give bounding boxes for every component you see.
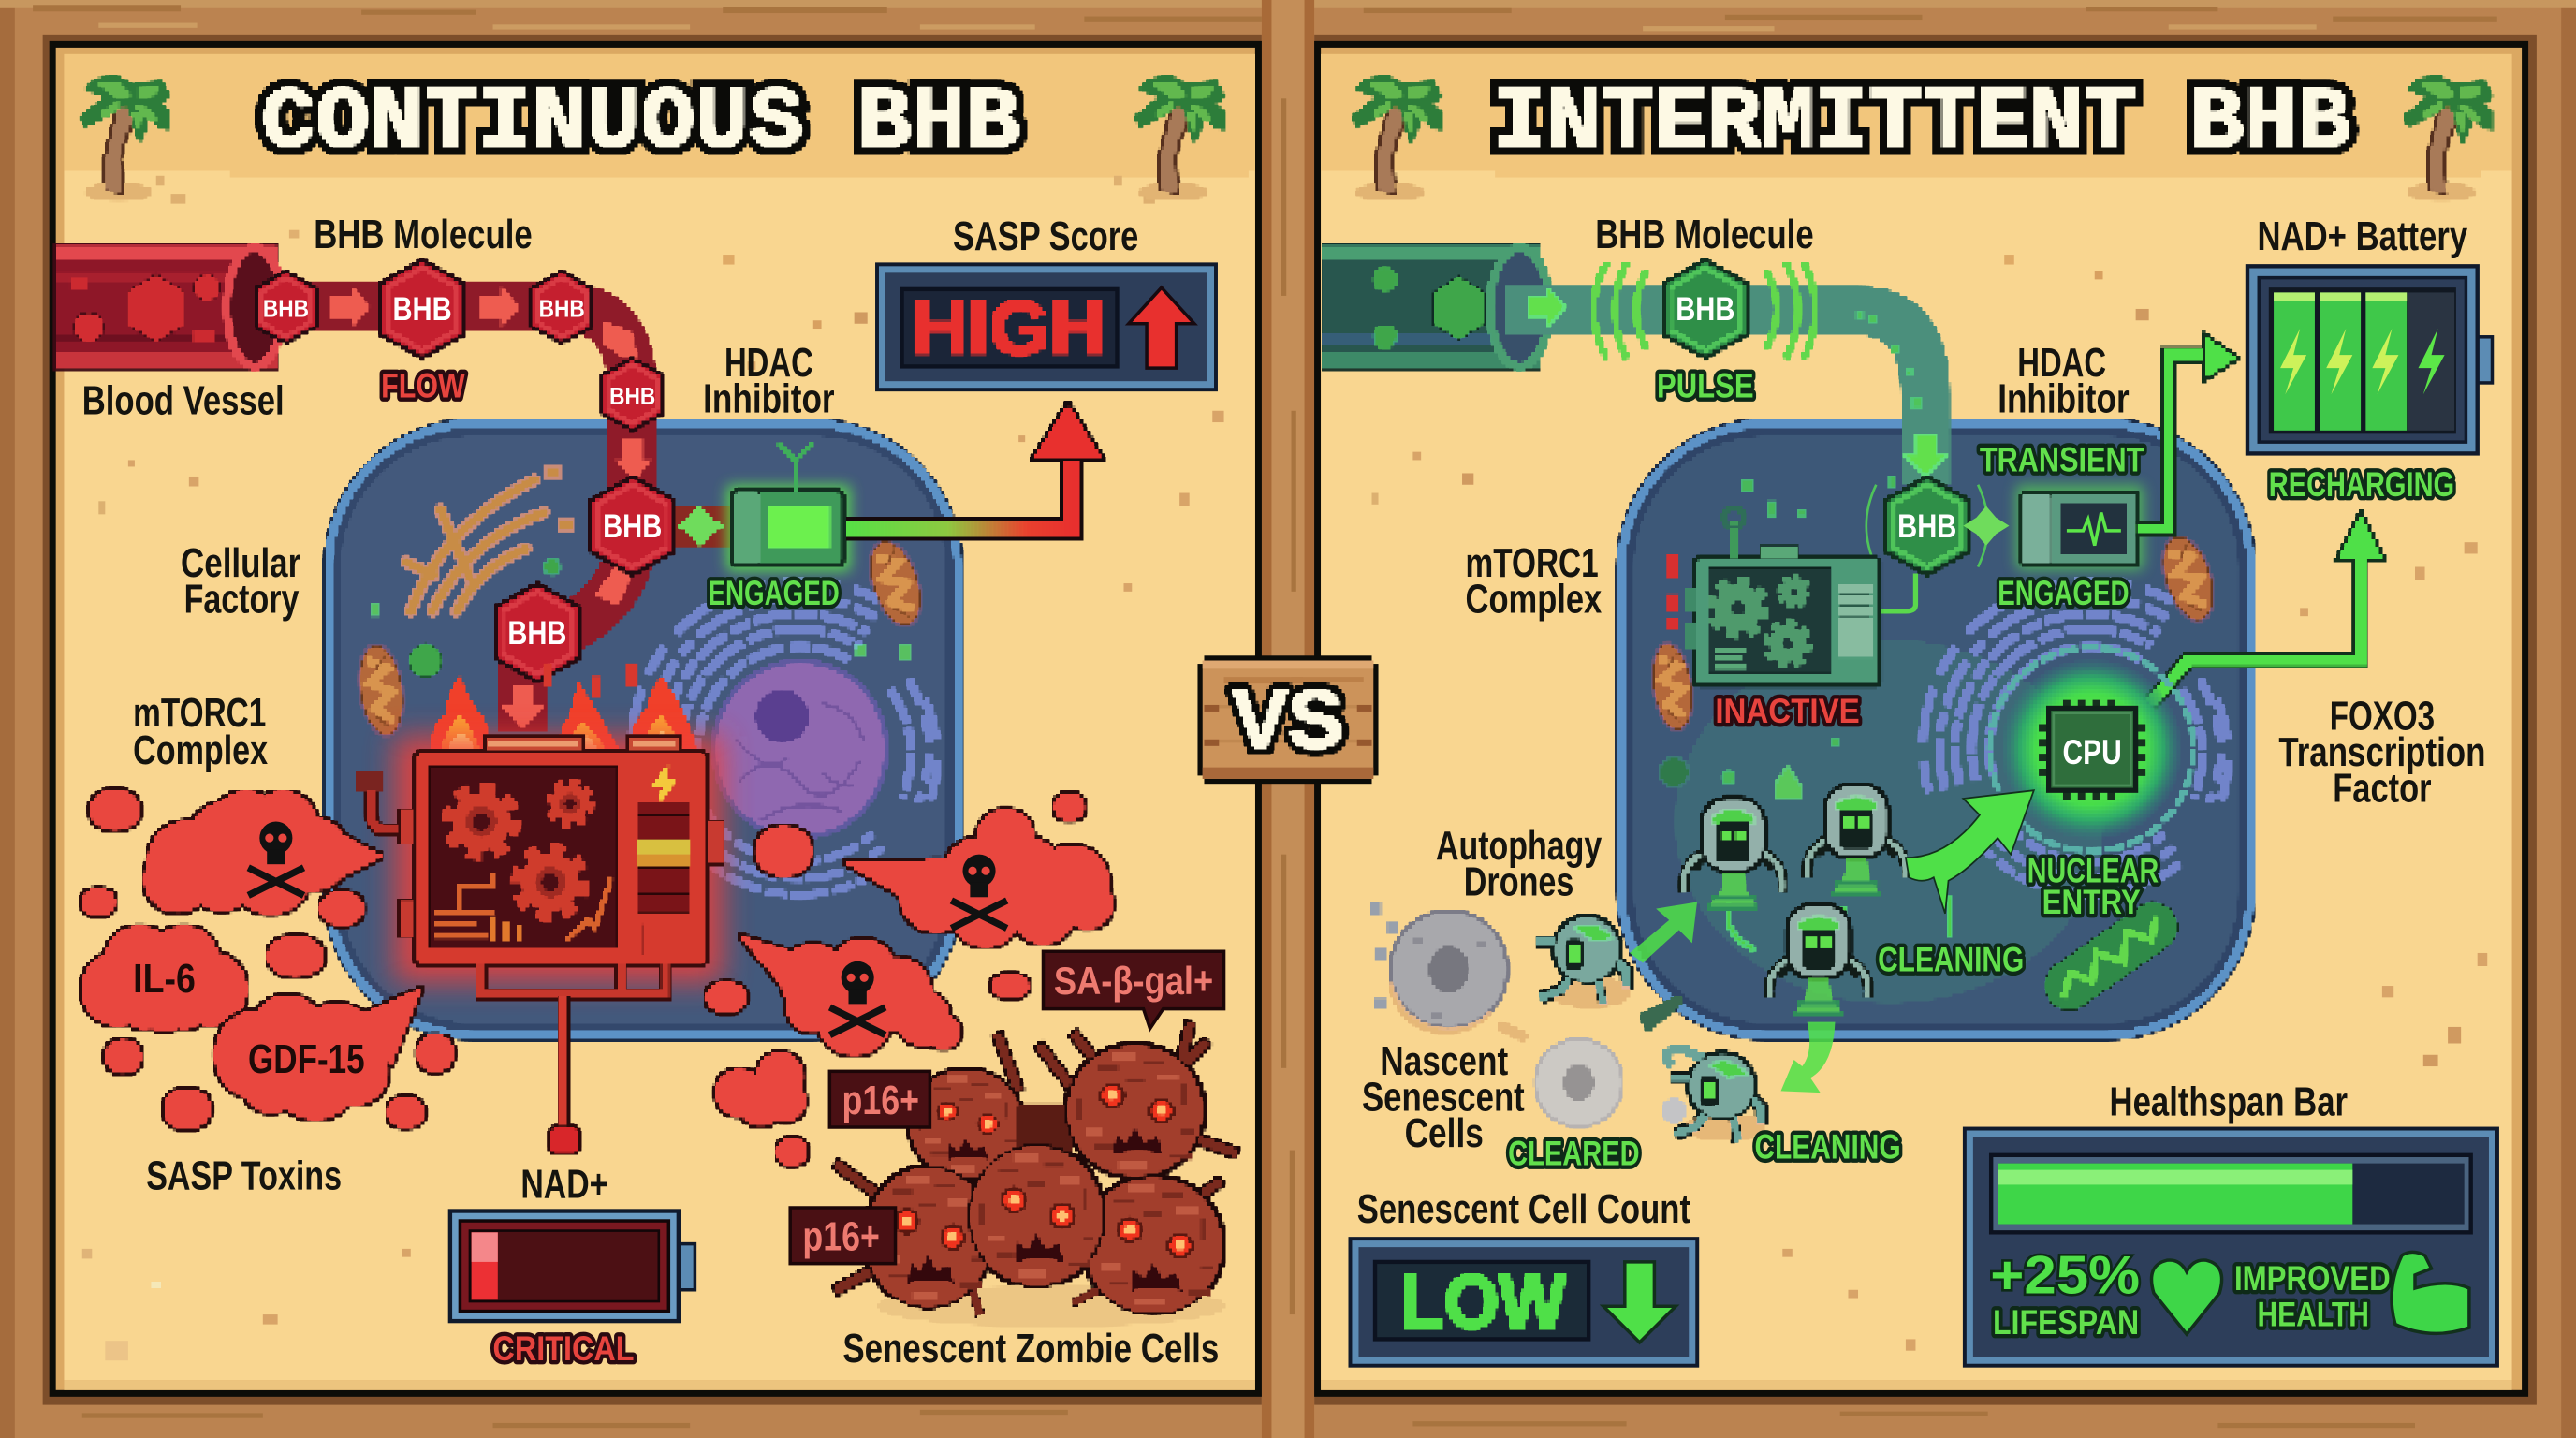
label: [1362, 1038, 1525, 1156]
tag: SA-beta-gal: [1043, 951, 1224, 1029]
label: Blood Vessel: [82, 377, 285, 423]
arrow: HDAC to NAD+ battery: [2137, 335, 2237, 529]
text: improved health: HEALTH: [2258, 1295, 2369, 1333]
label: Healthspan Bar: [2110, 1079, 2348, 1125]
dark patch: [1016, 1104, 1071, 1153]
label: mTORC1: [1466, 540, 1599, 586]
label: HDAC: [2017, 340, 2106, 386]
value: HIGH: [912, 286, 1105, 370]
drone 2: [1807, 785, 1906, 894]
BHB hex 3: [533, 272, 592, 342]
title: continuous BHB: CONTINUOUS BHB: [261, 74, 1020, 172]
label: Senescent: [1362, 1074, 1525, 1120]
zombie back: [909, 1069, 1023, 1179]
mitochondrion: [862, 536, 929, 631]
label: Transcription: [2278, 729, 2485, 775]
label: [703, 340, 835, 422]
label: Senescent Cell Count: [1357, 1186, 1690, 1232]
autophagy drone cleaning: [1662, 1049, 1764, 1140]
zombie left: [864, 1167, 992, 1308]
HDAC inhibitor device: continuous: [679, 444, 851, 572]
bits: [1660, 477, 1895, 799]
endoplasmic reticulum: [1923, 580, 2229, 895]
label: Nascent: [1380, 1038, 1508, 1084]
label: [1466, 540, 1603, 623]
wire to NAD+: [550, 997, 578, 1153]
BHB hexagon in cell: BHB: [1897, 508, 1956, 545]
senescent count panel: [1351, 1239, 1697, 1365]
icon: palm tree left 2: [1135, 76, 1224, 200]
status label: recharging: RECHARGING: [2269, 465, 2454, 504]
autophagy drone engaging: [1538, 917, 1630, 1007]
BHB hexagon in cell: [1866, 478, 1988, 574]
label: Cellular: [181, 540, 300, 586]
VS sign: [1197, 655, 1379, 784]
label: Inhibitor: [1998, 376, 2130, 422]
blood vessel: continuous: [56, 245, 283, 368]
bolts: [2280, 329, 2445, 394]
toxin cloud with skull: [741, 936, 959, 1055]
zombie top: [1066, 1044, 1204, 1177]
label: NAD+ Battery: [2258, 213, 2468, 259]
status label: critical: CRITICAL: [493, 1329, 634, 1368]
status label: inactive: INACTIVE: [1715, 692, 1860, 730]
status label: nuclear entry: ENTRY: [2042, 883, 2141, 921]
BHB molecule chain: continuous: [256, 261, 674, 681]
label: SASP Score: [953, 213, 1138, 259]
BHB hex 6: [496, 585, 578, 681]
mitochondrion: [355, 643, 407, 738]
debris: [1498, 996, 1682, 1042]
zombie right: [1083, 1176, 1223, 1315]
health bar: [1991, 1155, 2471, 1232]
arrow: [1528, 287, 1566, 327]
arrow: [1904, 435, 1947, 477]
cell: intermittent panel: [1621, 424, 2250, 1035]
label: Factory: [184, 577, 300, 623]
label: BHB Molecule: [314, 212, 533, 257]
arrow: green drone out: [1781, 1022, 1835, 1093]
healthspan panel: [1965, 1129, 2497, 1365]
gears: [1712, 578, 1808, 665]
toxin cloud: GDF-15: [215, 990, 420, 1119]
flames: [431, 666, 696, 756]
vent panel: [1840, 585, 1871, 657]
status label: pulse: PULSE: [1657, 367, 1754, 405]
status label: flow: FLOW: [381, 367, 465, 405]
mTORC1 factory: overactive: [357, 738, 723, 994]
mitochondrion: [1648, 642, 1696, 732]
SASP score panel: [877, 265, 1216, 389]
tag: p16+: p16+: [842, 1078, 919, 1123]
battery: critical NAD+: [450, 1211, 695, 1321]
arrow: HDAC to SASP score: [848, 403, 1104, 529]
drone 3: [1769, 905, 1868, 1014]
zombie front: [969, 1145, 1105, 1286]
BHB pulse molecule: BHB: [1676, 291, 1734, 328]
label: [2278, 693, 2485, 811]
status label: cleaning: CLEANING: [1878, 940, 2024, 978]
arrow: curved green to nucleus: [1906, 790, 2034, 914]
BHB hex 4: BHB: [609, 382, 655, 410]
toxin cloud with skull: [846, 810, 1112, 946]
BHB hex 2: BHB: [392, 291, 452, 328]
readout lines: [435, 874, 611, 940]
golgi strands: [406, 479, 544, 611]
BHB hex 2: [381, 261, 463, 357]
toxin cloud: IL-6: IL-6: [133, 956, 196, 1002]
BHB pulse molecule: [1593, 261, 1815, 359]
mitochondrion: [2155, 531, 2222, 625]
BHB hex 1: [256, 272, 315, 342]
BHB hex 3: BHB: [539, 295, 585, 323]
gears: [448, 783, 591, 916]
BHB hex 6: BHB: [507, 615, 567, 652]
icon: down arrow: [1603, 1262, 1676, 1343]
arrow: FOXO3 to battery: [2150, 513, 2384, 703]
label: Factor: [2333, 765, 2432, 811]
arrow: green drone to cell: [1630, 902, 1697, 962]
BHB hex 1: BHB: [263, 295, 309, 323]
icon: lightning: [654, 764, 677, 805]
label: Autophagy: [1436, 823, 1603, 869]
flow arrows: [332, 287, 651, 728]
pulse dots: [1856, 312, 1922, 407]
title: intermittent BHB: INTERMITTENT BHB: [1493, 74, 2351, 172]
icon: up arrow: [1129, 287, 1194, 368]
label: Complex: [1466, 577, 1603, 623]
icon: heart: [2152, 1260, 2222, 1334]
status label: engaged: ENGAGED: [708, 574, 840, 612]
toxin cloud with skull: [144, 792, 381, 914]
BHB hex 5: BHB: [603, 508, 662, 545]
panel: continuous BHB background: [50, 41, 1262, 1397]
label: [1436, 823, 1603, 905]
label: HDAC: [724, 340, 813, 386]
senescent zombie cells: [840, 1027, 1232, 1326]
label: FOXO3: [2330, 693, 2435, 739]
nucleus: [714, 662, 886, 836]
label: Cells: [1405, 1110, 1484, 1156]
status label: cleaning: CLEANING: [1754, 1127, 1901, 1166]
tentacles: [840, 1027, 1232, 1312]
tag: p16+: [829, 1071, 929, 1127]
status label: cleared: CLEARED: [1508, 1134, 1640, 1172]
cell: continuous panel: [329, 424, 958, 1035]
status label: nuclear entry: NUCLEAR: [2027, 851, 2159, 889]
BHB hex 4: [603, 360, 662, 429]
indicator slots: [637, 801, 690, 912]
toxin cloud: GDF-15: GDF-15: [248, 1036, 365, 1082]
status label: nuclear entry: [2027, 851, 2159, 921]
label: SASP Toxins: [146, 1153, 342, 1199]
text: lifespan: LIFESPAN: [1993, 1303, 2139, 1342]
flow pipe: continuous: [283, 287, 735, 731]
label: NAD+: [520, 1161, 607, 1207]
NAD+ battery: [2247, 266, 2492, 453]
icon: palm tree left 1: [80, 76, 169, 200]
status label: engaged: ENGAGED: [1998, 574, 2130, 612]
wave arcs: [1593, 263, 1815, 359]
nascent senescent cell small: [1536, 1040, 1621, 1125]
drone 1: [1684, 799, 1783, 907]
text: improved health: [2234, 1259, 2391, 1333]
label: Drones: [1464, 859, 1573, 905]
HDAC inhibitor device: intermittent: [2016, 485, 2144, 570]
mTORC1 inactive machine: [1673, 507, 1880, 685]
label: [133, 690, 269, 773]
VS sign: VS: [1232, 674, 1344, 766]
label: Complex: [133, 727, 269, 773]
panel: intermittent BHB background: [1314, 41, 2528, 1397]
small organelles: [372, 466, 910, 677]
value: +25%: +25%: [1990, 1245, 2140, 1305]
icon: palm tree right 1: [1352, 76, 1441, 200]
value: LOW: [1401, 1260, 1566, 1344]
nascent senescent cell large: [1372, 903, 1506, 1034]
drones in cell: [1684, 785, 1906, 1014]
toxin droplets and small cloud: [82, 790, 1084, 1165]
toxin cloud: IL-6: [82, 927, 246, 1030]
status label: transient: TRANSIENT: [1980, 441, 2144, 479]
tag: SA-beta-gal: SA-β-gal+: [1054, 959, 1213, 1003]
mTORC1 factory glow: [394, 736, 723, 983]
nucleus: CPU FOXO3: CPU: [2063, 733, 2122, 771]
endoplasmic reticulum: [632, 580, 937, 895]
arrow: BHB to HDAC: [1963, 506, 2009, 546]
BHB hex 5: [592, 478, 674, 574]
connector: BHB to mTORC1: [1880, 574, 1915, 611]
label: mTORC1: [133, 690, 266, 736]
label: BHB Molecule: [1595, 212, 1814, 257]
text: improved health: IMPROVED: [2234, 1259, 2391, 1298]
flow pipe: intermittent: [1505, 287, 1947, 485]
icon: palm tree right 2: [2404, 76, 2492, 200]
tag: p16+: p16+: [802, 1214, 880, 1260]
label: [1998, 340, 2130, 422]
label: Inhibitor: [703, 376, 835, 422]
mitochondrion green: [2035, 893, 2188, 1020]
blood vessel: intermittent: [1323, 245, 1549, 368]
icon: muscle: [2392, 1252, 2469, 1333]
label: Senescent Zombie Cells: [842, 1326, 1219, 1372]
nucleus: CPU FOXO3: [1989, 648, 2193, 851]
label: [181, 540, 300, 623]
green streaks: [1728, 897, 1950, 949]
palm trees: [80, 76, 2492, 200]
